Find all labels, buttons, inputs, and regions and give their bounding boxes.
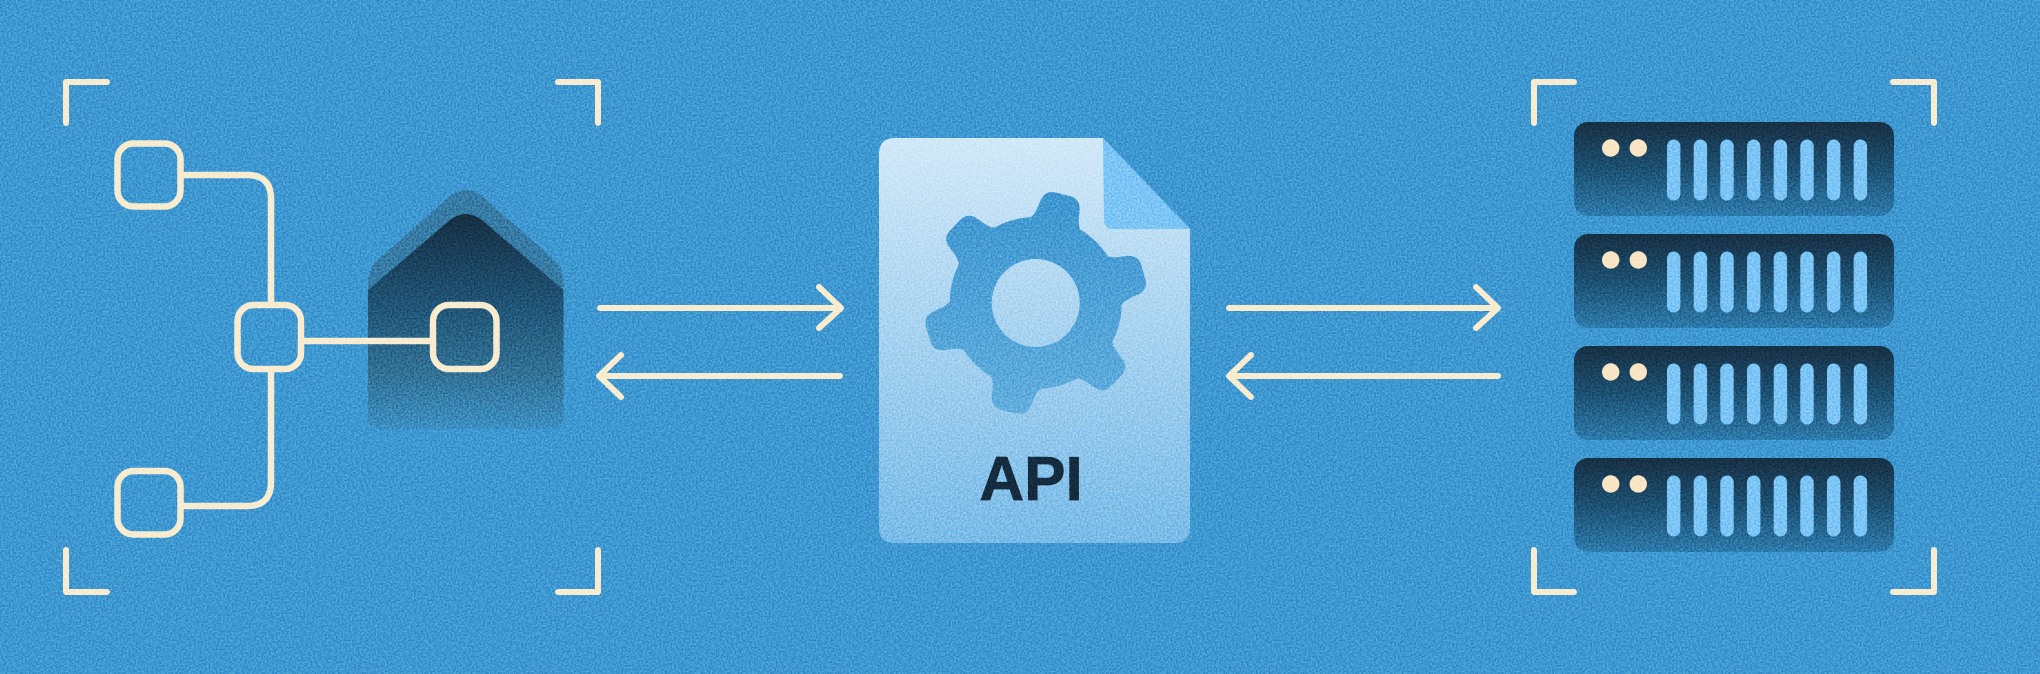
server unit 2 bbox=[1574, 234, 1894, 328]
frame brackets: client bbox=[66, 82, 598, 592]
node: inside house bbox=[433, 305, 496, 369]
node: bottom left bbox=[118, 471, 180, 534]
panel: API document bbox=[879, 138, 1190, 543]
arrows: API and servers bbox=[1229, 287, 1498, 397]
node: top left bbox=[118, 144, 180, 206]
server unit 3 bbox=[1574, 346, 1894, 440]
connector lines bbox=[183, 175, 433, 506]
server unit 1 bbox=[1574, 122, 1894, 216]
server unit 4 bbox=[1574, 458, 1894, 552]
document page bbox=[879, 138, 1190, 543]
panel: client network bbox=[66, 82, 598, 592]
icon: house bbox=[368, 190, 564, 429]
label: API: API bbox=[979, 445, 1083, 514]
arrows: client and API bbox=[599, 287, 841, 397]
document fold bbox=[1103, 138, 1190, 229]
node: hub bbox=[238, 305, 301, 369]
panel: servers bbox=[1534, 82, 1934, 592]
frame brackets: servers bbox=[1534, 82, 1934, 592]
icon: gear bbox=[924, 191, 1148, 415]
